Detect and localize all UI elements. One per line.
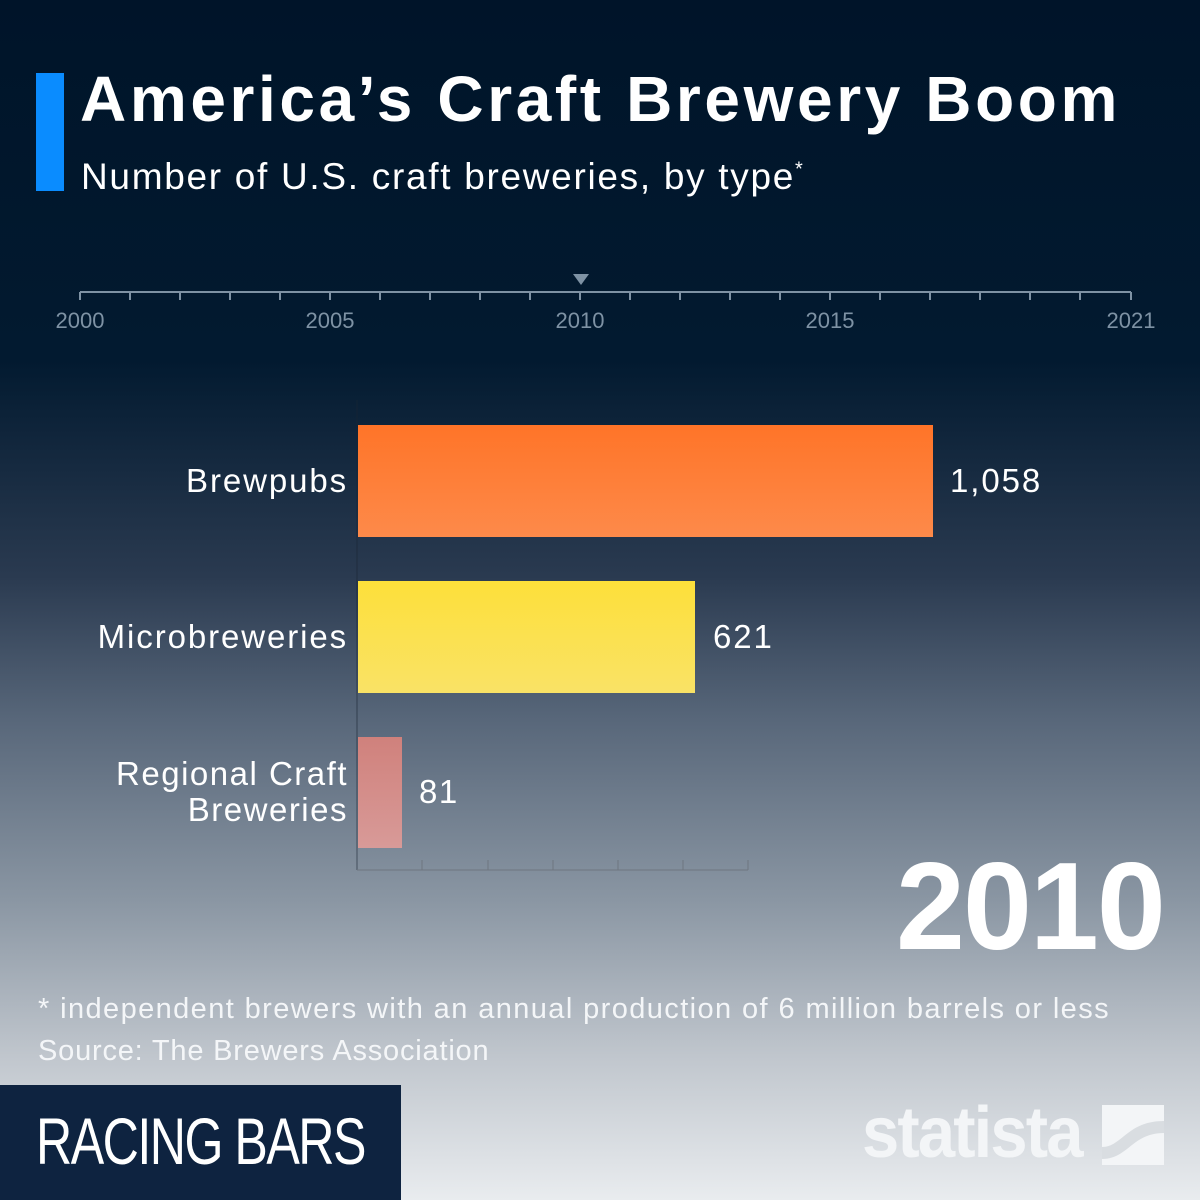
timeline: 2021 (1107, 308, 1155, 333)
statista logo: statista (862, 1093, 1082, 1173)
year label: 2010 (896, 838, 1164, 976)
subtitle: Number of U.S. craft breweries, by type* (81, 156, 805, 197)
racing bars badge (0, 1085, 401, 1200)
bar: Microbreweries (98, 581, 774, 693)
timeline: 2000 (56, 308, 104, 333)
timeline (56, 274, 1155, 333)
bar chart (98, 400, 1042, 870)
source: Source: The Brewers Association (38, 1035, 489, 1067)
timeline: 2005 (306, 308, 354, 333)
timeline: 2010 (556, 308, 604, 333)
bar: Microbreweries: Microbreweries (98, 618, 348, 655)
footnote: * independent brewers with an annual production of 6 million barrels or less (38, 993, 1110, 1025)
title accent bar (36, 73, 64, 191)
bar: Regional Craft Breweries (116, 737, 459, 848)
title: America’s Craft Brewery Boom (80, 63, 1121, 135)
bar: Brewpubs: Brewpubs (186, 462, 348, 499)
racing bars badge: RACING BARS (36, 1104, 365, 1178)
bar: Regional Craft Breweries: Regional Craft (116, 755, 348, 792)
bar: Regional Craft Breweries: Breweries (188, 791, 348, 828)
timeline: 2015 (806, 308, 854, 333)
bar: Brewpubs: 1,058 (950, 462, 1042, 499)
bar: Microbreweries: 621 (713, 618, 774, 655)
bar: Brewpubs (186, 425, 1042, 537)
bar: Regional Craft Breweries: 81 (419, 773, 459, 810)
